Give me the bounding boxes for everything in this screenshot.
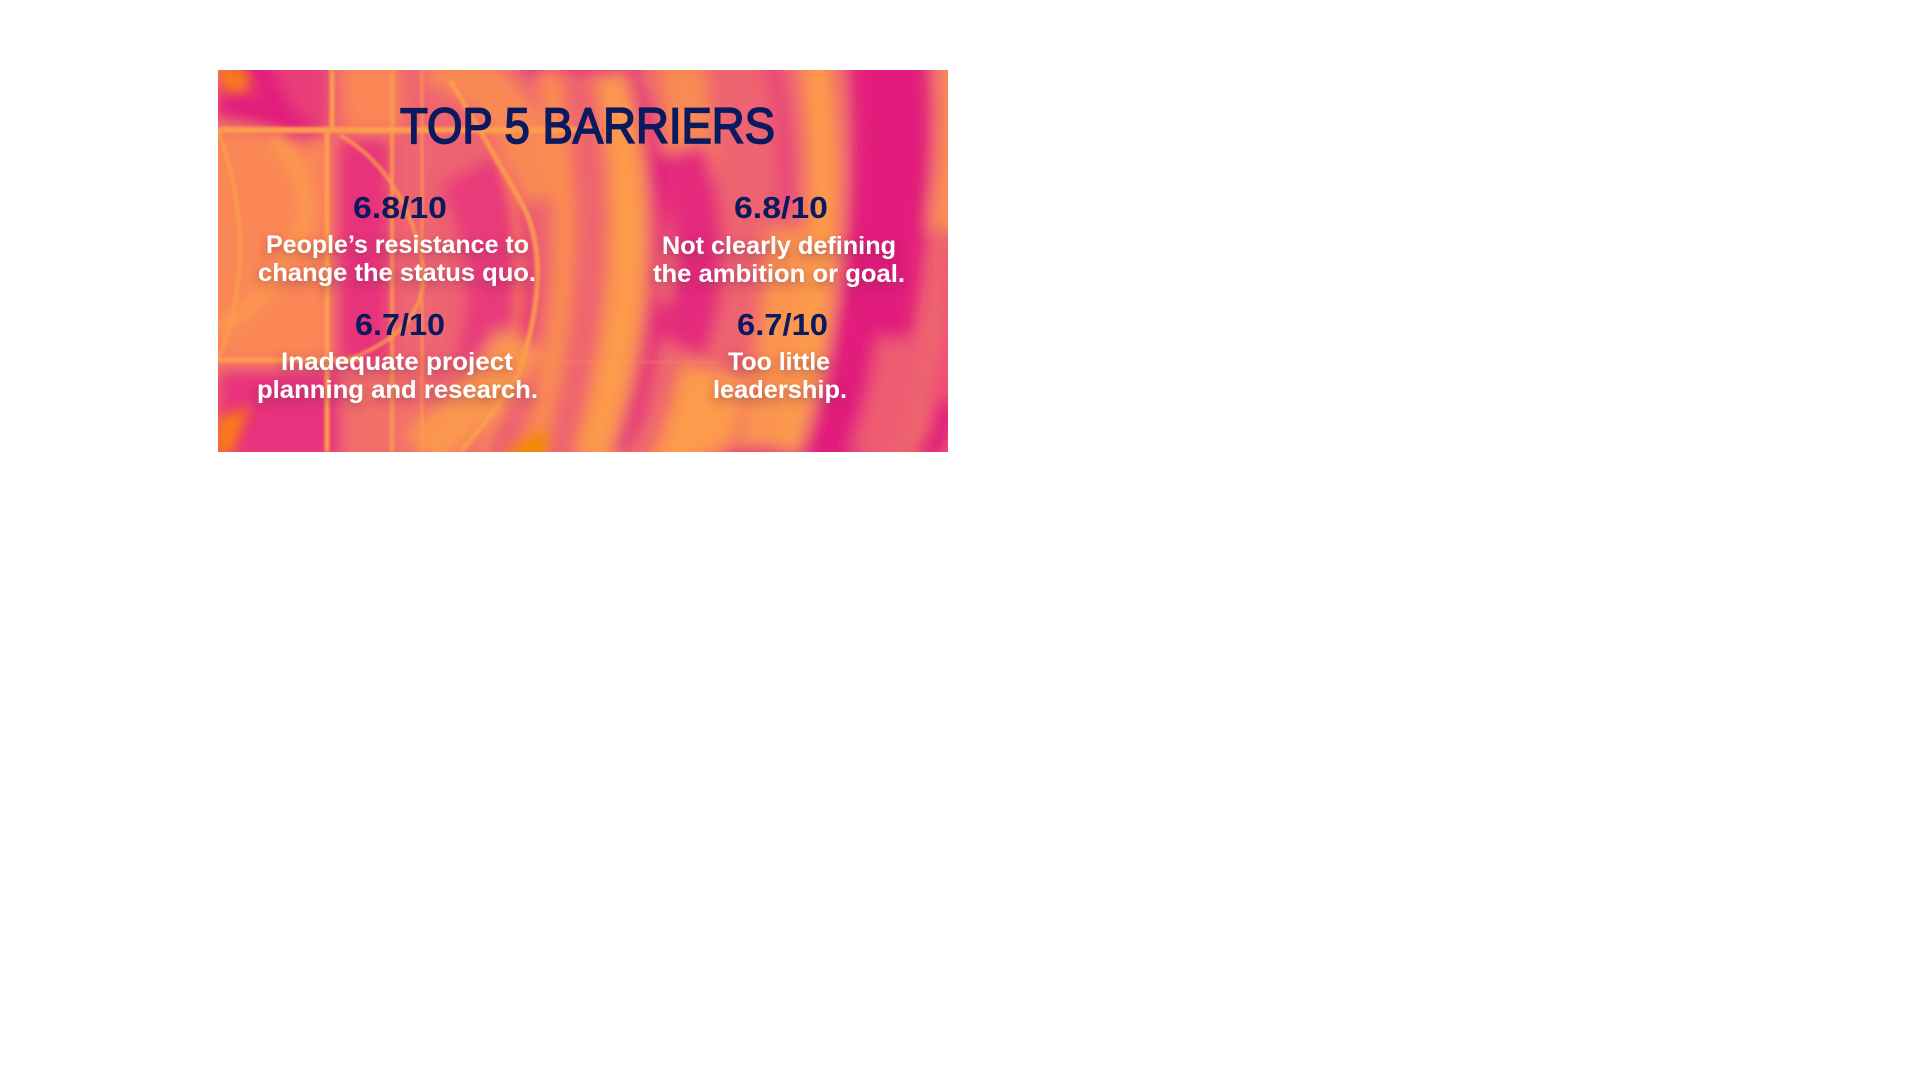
panel: abstract gradient background	[218, 70, 948, 452]
text: defining ambition: Not clearly defining	[662, 232, 896, 260]
text: defining ambition	[653, 232, 905, 288]
text: resistance to change: People’s resistance to	[266, 231, 529, 259]
text: leadership: leadership.	[713, 376, 847, 404]
score: leadership: 6.7/10	[737, 307, 828, 342]
score: project planning: 6.7/10	[355, 307, 445, 342]
text: resistance to change	[258, 231, 536, 287]
text: project planning: Inadequate project	[281, 348, 514, 376]
text: resistance to change: change the status quo.	[258, 259, 536, 287]
title: TOP 5 BARRIERS	[400, 98, 775, 154]
score: resistance to change: 6.8/10	[353, 190, 447, 225]
text: project planning	[257, 348, 538, 404]
score: defining ambition: 6.8/10	[734, 190, 828, 225]
text: leadership: Too little	[728, 348, 830, 376]
text: defining ambition: the ambition or goal.	[653, 260, 905, 288]
text: leadership	[713, 348, 847, 404]
text: project planning: planning and research.	[257, 376, 538, 404]
